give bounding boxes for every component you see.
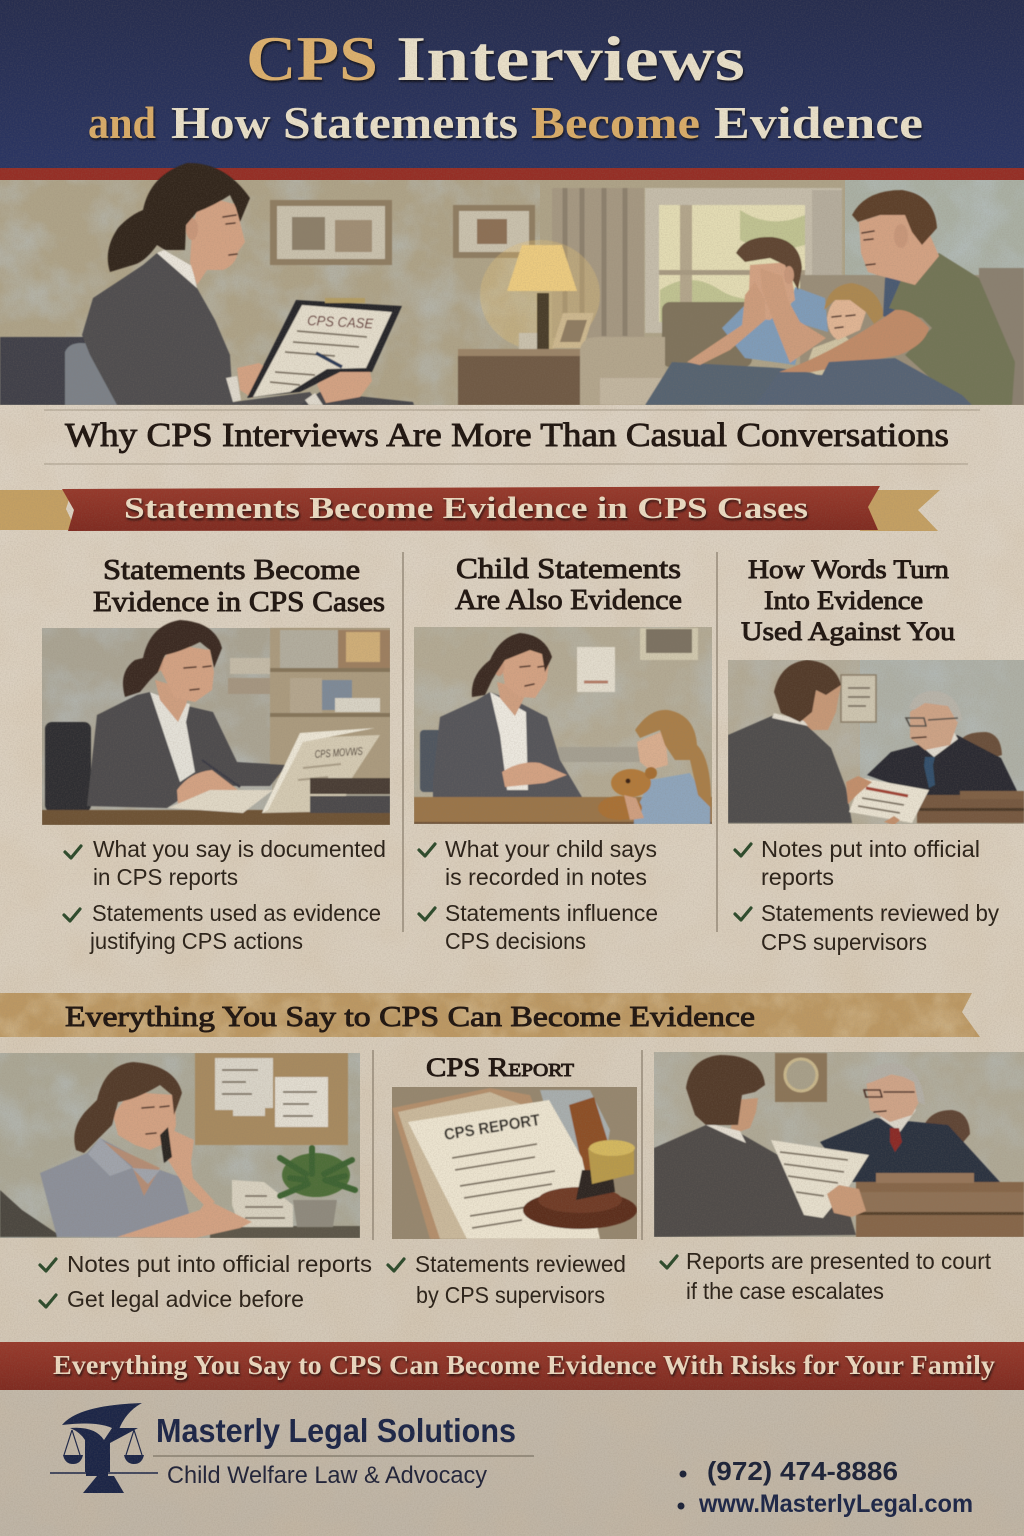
column 1 bullets — [64, 836, 386, 954]
clipboard labelled CPS CASE — [247, 298, 402, 398]
column 2 heading: Are Also Evidence — [455, 585, 682, 616]
title banner — [0, 0, 1024, 180]
wall frames — [270, 200, 535, 265]
illustration: CPS report and gavel — [392, 1087, 637, 1239]
subtitle: why CPS interviews matter: Why CPS Interviews Are More Than Casual Conversations — [65, 417, 949, 454]
column 2 bullets: CPS decisions — [445, 928, 586, 954]
tan section band: Everything You Say to CPS Can Become Evidence — [65, 1001, 755, 1033]
contact details: www.MasterlyLegal.com — [698, 1490, 973, 1518]
caseworker — [82, 163, 414, 405]
column 2 bullets: Statements influence — [445, 900, 658, 926]
logo: scales of justice — [50, 1403, 158, 1493]
column 3 heading: How Words Turn — [748, 555, 949, 584]
row panel 2: CPS report — [388, 1053, 637, 1308]
row panel 1 bullets: Get legal advice before — [67, 1286, 304, 1312]
column 1 bullets: Statements used as evidence — [92, 900, 381, 926]
subtitle: why CPS interviews matter — [44, 410, 980, 464]
column 3 heading — [741, 555, 955, 646]
ribbon banner — [0, 486, 940, 531]
title line 1: Interviews — [396, 23, 745, 94]
illustration: lawyer presenting report to judge — [654, 1052, 1024, 1237]
contact details: (972) 474-8886 — [707, 1456, 898, 1486]
bookcase — [228, 628, 390, 778]
hero illustration: caseworker interviewing family — [0, 163, 1024, 405]
row panel 1 bullets — [40, 1251, 372, 1312]
column 2 bullets — [419, 836, 658, 954]
sofa — [580, 268, 1024, 405]
lamp and side table — [458, 240, 600, 405]
tagline: Child Welfare Law & Advocacy — [167, 1462, 487, 1489]
column 3 heading: Used Against You — [741, 617, 955, 646]
title line 1: CPS — [246, 23, 378, 94]
column 1 bullets: What you say is documented — [93, 836, 386, 862]
title line 2: How Statements — [171, 97, 518, 148]
tan section band — [0, 993, 980, 1037]
column 1 bullets: in CPS reports — [93, 864, 238, 890]
firm name: Masterly Legal Solutions — [156, 1412, 516, 1449]
title line 2 — [88, 97, 923, 148]
row panel 1: woman on phone — [0, 1053, 372, 1312]
column 3 bullets: Statements reviewed by — [761, 900, 999, 926]
title line 2: Evidence — [714, 97, 923, 148]
column 1 bullets: justifying CPS actions — [89, 928, 303, 954]
column 3 bullets: CPS supervisors — [761, 929, 927, 955]
column 2 bullets: is recorded in notes — [445, 864, 647, 890]
clipboard labelled CPS CASE: CPS CASE — [307, 312, 374, 331]
column 3 bullets: reports — [761, 864, 834, 890]
row panel 3 bullets: Reports are presented to court — [686, 1248, 992, 1274]
title line 2: and — [88, 97, 156, 148]
illustration: caseworker writing at desk — [42, 620, 390, 825]
column 1 heading: Evidence in CPS Cases — [93, 587, 385, 618]
row panel 1 bullets: Notes put into official reports — [67, 1251, 372, 1277]
column 1 heading: Statements Become — [103, 555, 360, 586]
column 3 bullets — [735, 836, 999, 955]
family on sofa — [645, 190, 1015, 405]
CPS REPORT heading: CPS Report — [426, 1053, 574, 1082]
column 3 bullets: Notes put into official — [761, 836, 980, 862]
column 3: how words turn into evidence — [728, 555, 1024, 955]
contact details — [678, 1456, 973, 1518]
man with hands over face — [645, 237, 828, 405]
column 2 bullets: What your child says — [445, 836, 657, 862]
red closing banner: Everything You Say to CPS Can Become Evidence With Risks for Your Family — [53, 1350, 996, 1380]
row panel 3: court — [654, 1052, 1024, 1304]
armchair — [0, 337, 118, 405]
column 2 heading: Child Statements — [456, 554, 681, 585]
title line 1 — [246, 23, 745, 94]
row panel 2 bullets: Statements reviewed — [415, 1251, 626, 1277]
column 2 heading — [455, 554, 682, 616]
illustration: caseworker writing at desk: CPS MOVWS — [314, 746, 364, 761]
illustration: caseworker with child and teddy bear — [414, 627, 712, 824]
title line 2: Become — [531, 97, 700, 148]
illustration: man handing document to judge — [728, 660, 1024, 825]
red closing banner — [0, 1342, 1024, 1390]
ribbon banner: Statements Become Evidence in CPS Cases — [124, 490, 808, 525]
row panel 2 bullets: by CPS supervisors — [416, 1282, 605, 1308]
row panel 3 bullets — [661, 1248, 992, 1304]
illustration: CPS report and gavel: CPS REPORT — [443, 1112, 542, 1144]
father — [755, 190, 1015, 405]
curtains and window — [552, 188, 842, 338]
column 3 heading: Into Evidence — [764, 586, 923, 615]
row panel 3 bullets: if the case escalates — [686, 1278, 884, 1304]
illustration: woman on phone at desk — [0, 1053, 360, 1238]
row panel 2 bullets — [388, 1251, 626, 1308]
column 1: statements become evidence — [42, 555, 390, 954]
column 2: child statements — [414, 554, 712, 954]
child — [808, 282, 884, 376]
footer — [50, 1403, 973, 1518]
column 1 heading — [93, 555, 385, 618]
